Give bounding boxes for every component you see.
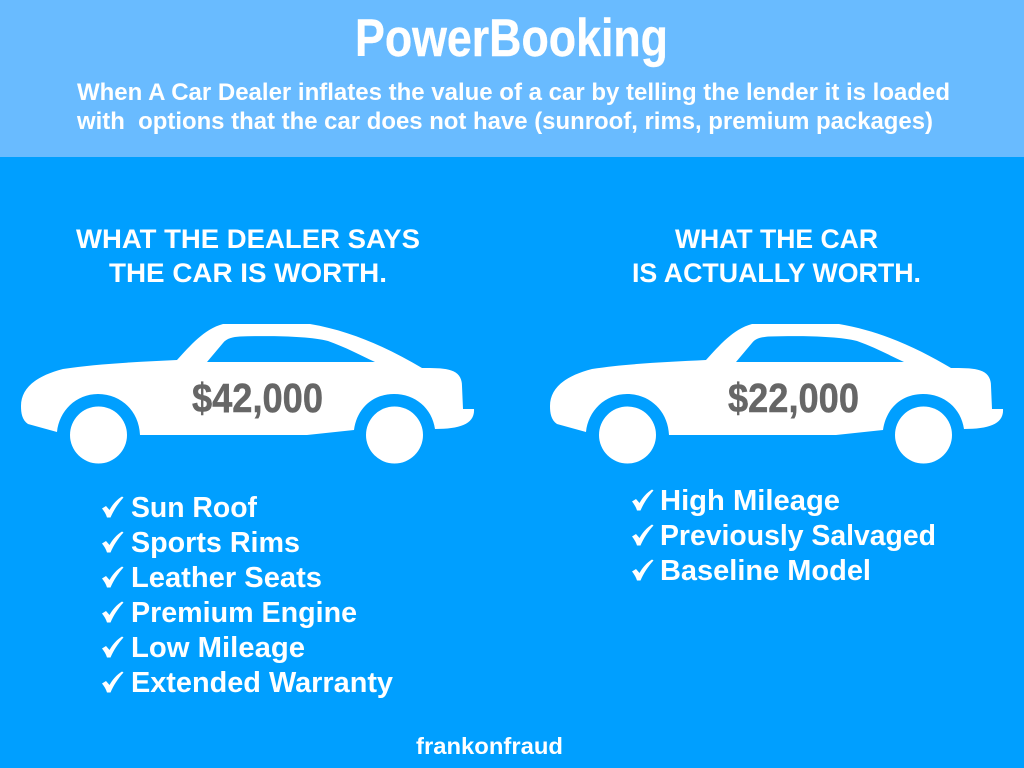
car: dealer value [21,324,474,464]
heading: actual value: WHAT THE CAR [675,224,878,254]
front wheel [366,406,423,464]
checklist: actual condition: Previously Salvaged [660,520,936,552]
car: actual value [550,324,1003,464]
heading: dealer value: THE CAR IS WORTH. [109,258,387,288]
checklist: dealer claims: Sun Roof [131,492,257,524]
heading: actual value [632,224,921,288]
checklist: dealer claims [102,492,393,699]
rear wheel [599,406,656,464]
title: PowerBooking [355,9,668,68]
checklist: actual condition [632,485,936,587]
checklist: actual condition: Baseline Model [660,555,871,587]
subtitle: When A Car Dealer inflates the value of a car by telling the lender it is loaded [77,79,950,106]
checklist: dealer claims: Extended Warranty [131,667,393,699]
header panel [0,0,1024,157]
checklist: dealer claims: Premium Engine [131,597,357,629]
subtitle [76,79,950,135]
heading: actual value: IS ACTUALLY WORTH. [632,258,921,288]
price: $42,000: $42,000 [192,375,323,421]
heading: dealer value [76,224,420,288]
footer credit: frankonfraud [416,733,563,759]
rear wheel [70,406,127,464]
checklist: dealer claims: Leather Seats [131,562,322,594]
price: $22,000: $22,000 [728,375,859,421]
checklist: dealer claims: Sports Rims [131,527,300,559]
checklist: actual condition: High Mileage [660,485,840,517]
front wheel [895,406,952,464]
heading: dealer value: WHAT THE DEALER SAYS [76,224,420,254]
subtitle: with options that the car does not have (sunroof, rims, premium packages) [76,108,933,135]
checklist: dealer claims: Low Mileage [131,632,305,664]
